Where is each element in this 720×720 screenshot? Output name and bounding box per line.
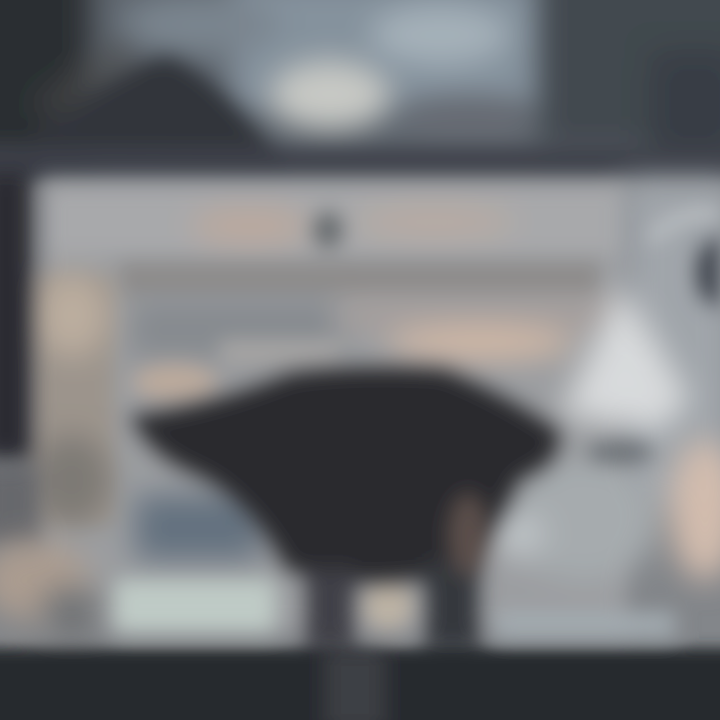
- dark horizontal band: [0, 147, 720, 175]
- central dark silhouette: [130, 366, 560, 650]
- right side bright area: [496, 180, 720, 580]
- central framed panel: [42, 182, 627, 632]
- lower left peach patch: [0, 540, 100, 640]
- pale lower strip: [115, 580, 675, 638]
- warm edge of silhouette: [448, 493, 488, 577]
- dark mass upper right: [540, 0, 720, 160]
- central ground post: [325, 650, 385, 720]
- dark hill upper left: [0, 0, 285, 165]
- dark ground band: [0, 648, 720, 720]
- left pale column: [32, 273, 114, 525]
- lower left tone: [0, 465, 40, 545]
- left dark edge: [0, 170, 32, 460]
- sky and upper background: [0, 0, 720, 180]
- lower left blue shadow: [135, 495, 260, 560]
